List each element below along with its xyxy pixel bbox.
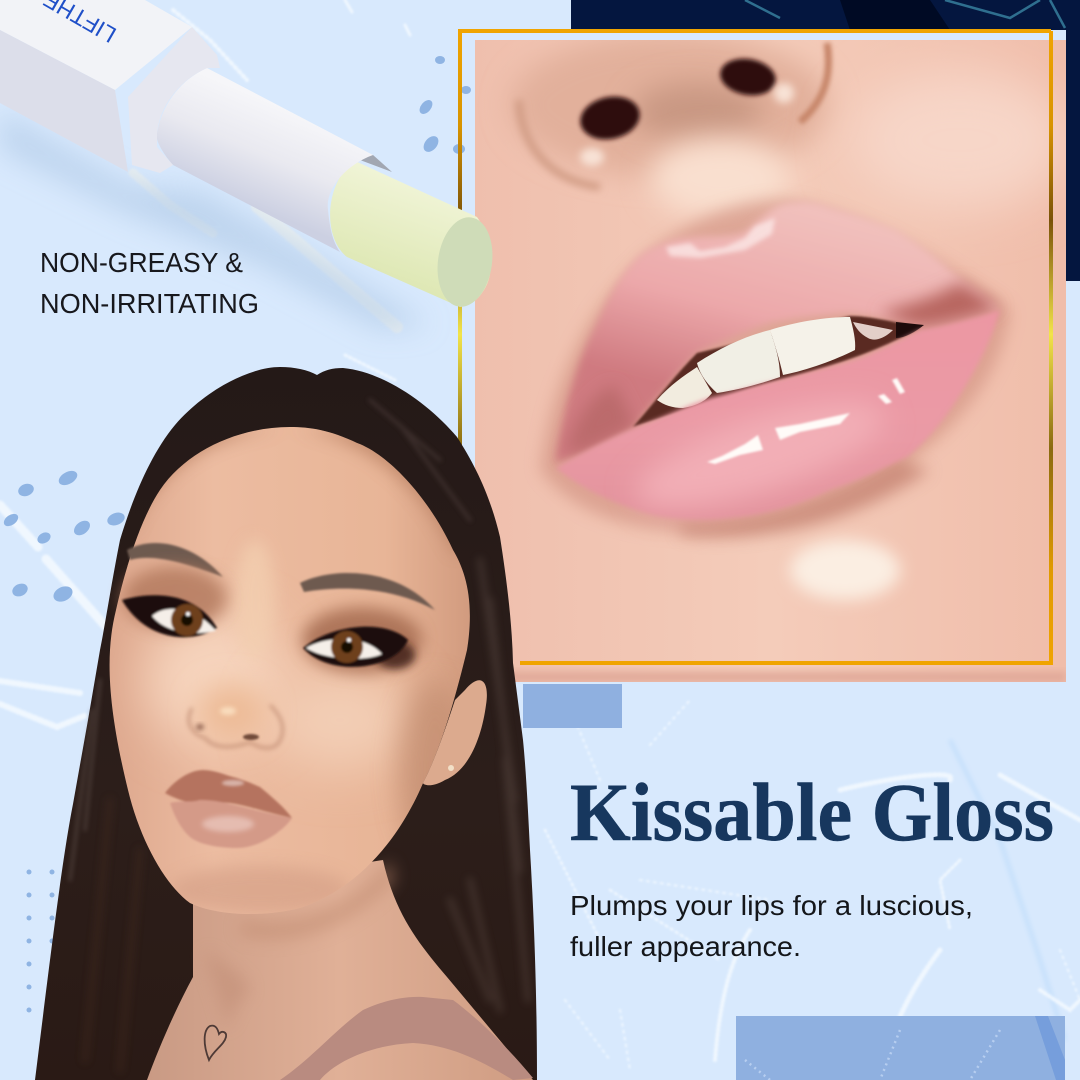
text: non-greasy claim: NON-GREASY &: [40, 247, 243, 278]
lip close-up photo: [475, 33, 1070, 682]
ear: [423, 680, 487, 785]
neck and shoulders: [147, 860, 533, 1080]
lower lip: [556, 310, 1000, 529]
body text: fuller appearance.: [570, 931, 801, 962]
top strap: [280, 997, 533, 1080]
nose area: [510, 33, 830, 218]
body text: Plumps your lips for a luscious,: [570, 890, 973, 921]
cap side face: [0, 30, 128, 172]
gold frame: right and bottom edges over photo: [520, 31, 1051, 663]
hair: [35, 367, 537, 1080]
left eye: [122, 595, 217, 637]
text: non-greasy claim: NON-IRRITATING: [40, 288, 259, 319]
hair streaks: [70, 400, 528, 1070]
upper lip: [555, 202, 1000, 463]
eyebrows: [127, 543, 435, 610]
dark navy fabric backing panel: [571, 0, 1080, 281]
balm: [330, 160, 491, 307]
lip shadow: [540, 200, 1010, 532]
balm rim: [352, 155, 392, 172]
collar: [128, 27, 220, 173]
face: [100, 420, 480, 920]
balm tip: [432, 214, 498, 310]
nose: [189, 684, 283, 748]
gold frame: left and top edges behind photo: [460, 31, 1051, 450]
cap top face: [0, 0, 192, 90]
tattoo: [205, 1026, 226, 1060]
blue tape rectangle: bottom: [736, 1016, 1065, 1080]
mouth interior: [633, 316, 920, 427]
heading: Kissable Gloss: [570, 766, 1054, 858]
earring: [448, 765, 454, 771]
blue tape rectangle: middle: [523, 684, 622, 728]
woman lips: [165, 770, 292, 848]
lipstick product: [0, 0, 498, 330]
chin highlight: [790, 540, 900, 600]
tube: [157, 68, 373, 252]
eye shadow: [123, 566, 422, 673]
teeth: [657, 317, 924, 408]
woman portrait: [35, 367, 537, 1080]
neck shadow: [240, 860, 395, 940]
right eye: [303, 627, 408, 667]
